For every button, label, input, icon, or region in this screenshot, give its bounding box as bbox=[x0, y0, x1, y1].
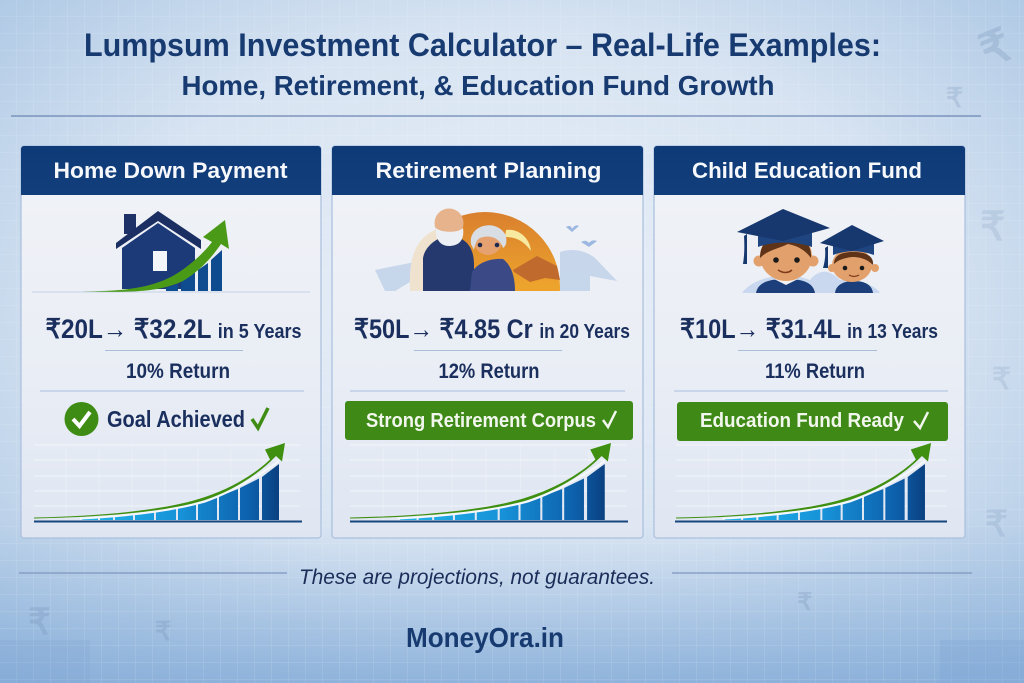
status: education fund ready: Education Fund Ready bbox=[700, 410, 905, 432]
return: retirement: 12% Return bbox=[438, 360, 540, 383]
status: strong retirement corpus bbox=[345, 401, 633, 440]
title: Lumpsum Investment Calculator – Real-Life Examples: bbox=[84, 27, 881, 63]
growth chart: retirement bbox=[350, 443, 628, 522]
watermark rupee symbols: ₹ bbox=[985, 503, 1008, 544]
disclaimer with rules: These are projections, not guarantees. bbox=[299, 566, 655, 589]
return: home: 10% Return bbox=[126, 360, 230, 383]
icon: graduating children bbox=[665, 209, 955, 293]
panel header: retirement: Retirement Planning bbox=[376, 158, 602, 183]
growth chart: education bbox=[675, 443, 947, 522]
value: education: ₹10L→ ₹31.4L in 13 Years bbox=[680, 314, 938, 344]
brand: MoneyOra.in bbox=[406, 622, 564, 653]
panel: retirement planning bbox=[332, 146, 643, 538]
status: education fund ready bbox=[677, 402, 948, 441]
status: goal achieved: Goal Achieved bbox=[107, 406, 245, 432]
watermark rupee symbols: ₹ bbox=[992, 363, 1011, 396]
status: goal achieved bbox=[64, 402, 268, 436]
watermark rupee symbols: ₹ bbox=[797, 589, 812, 616]
value: retirement: ₹50L→ ₹4.85 Cr in 20 Years bbox=[354, 314, 630, 344]
return: education: 11% Return bbox=[765, 360, 865, 383]
panel: home down payment bbox=[21, 146, 321, 538]
icon: senior couple with sunset bbox=[375, 208, 617, 291]
status: strong retirement corpus: Strong Retirement Corpus bbox=[366, 410, 596, 432]
growth chart: home bbox=[34, 443, 302, 522]
panel header: education: Child Education Fund bbox=[692, 158, 922, 183]
watermark rupee symbols: ₹ bbox=[946, 83, 963, 113]
panel: child education fund bbox=[654, 146, 965, 538]
title bbox=[84, 27, 881, 101]
panel header: education bbox=[654, 146, 965, 195]
title: Home, Retirement, & Education Fund Growth bbox=[182, 70, 774, 101]
panel header: home: Home Down Payment bbox=[54, 158, 288, 183]
value: home: ₹20L→ ₹32.2L in 5 Years bbox=[46, 314, 302, 344]
watermark rupee symbols: ₹ bbox=[155, 616, 172, 646]
icon: house with growth arrow bbox=[32, 211, 310, 292]
panel header: retirement bbox=[332, 146, 643, 195]
watermark rupee symbols: ₹ bbox=[28, 601, 51, 642]
watermark rupee symbols: ₹ bbox=[980, 205, 1005, 249]
panel header: home bbox=[21, 146, 321, 195]
watermark rupee symbols: ₹ bbox=[972, 18, 1019, 77]
